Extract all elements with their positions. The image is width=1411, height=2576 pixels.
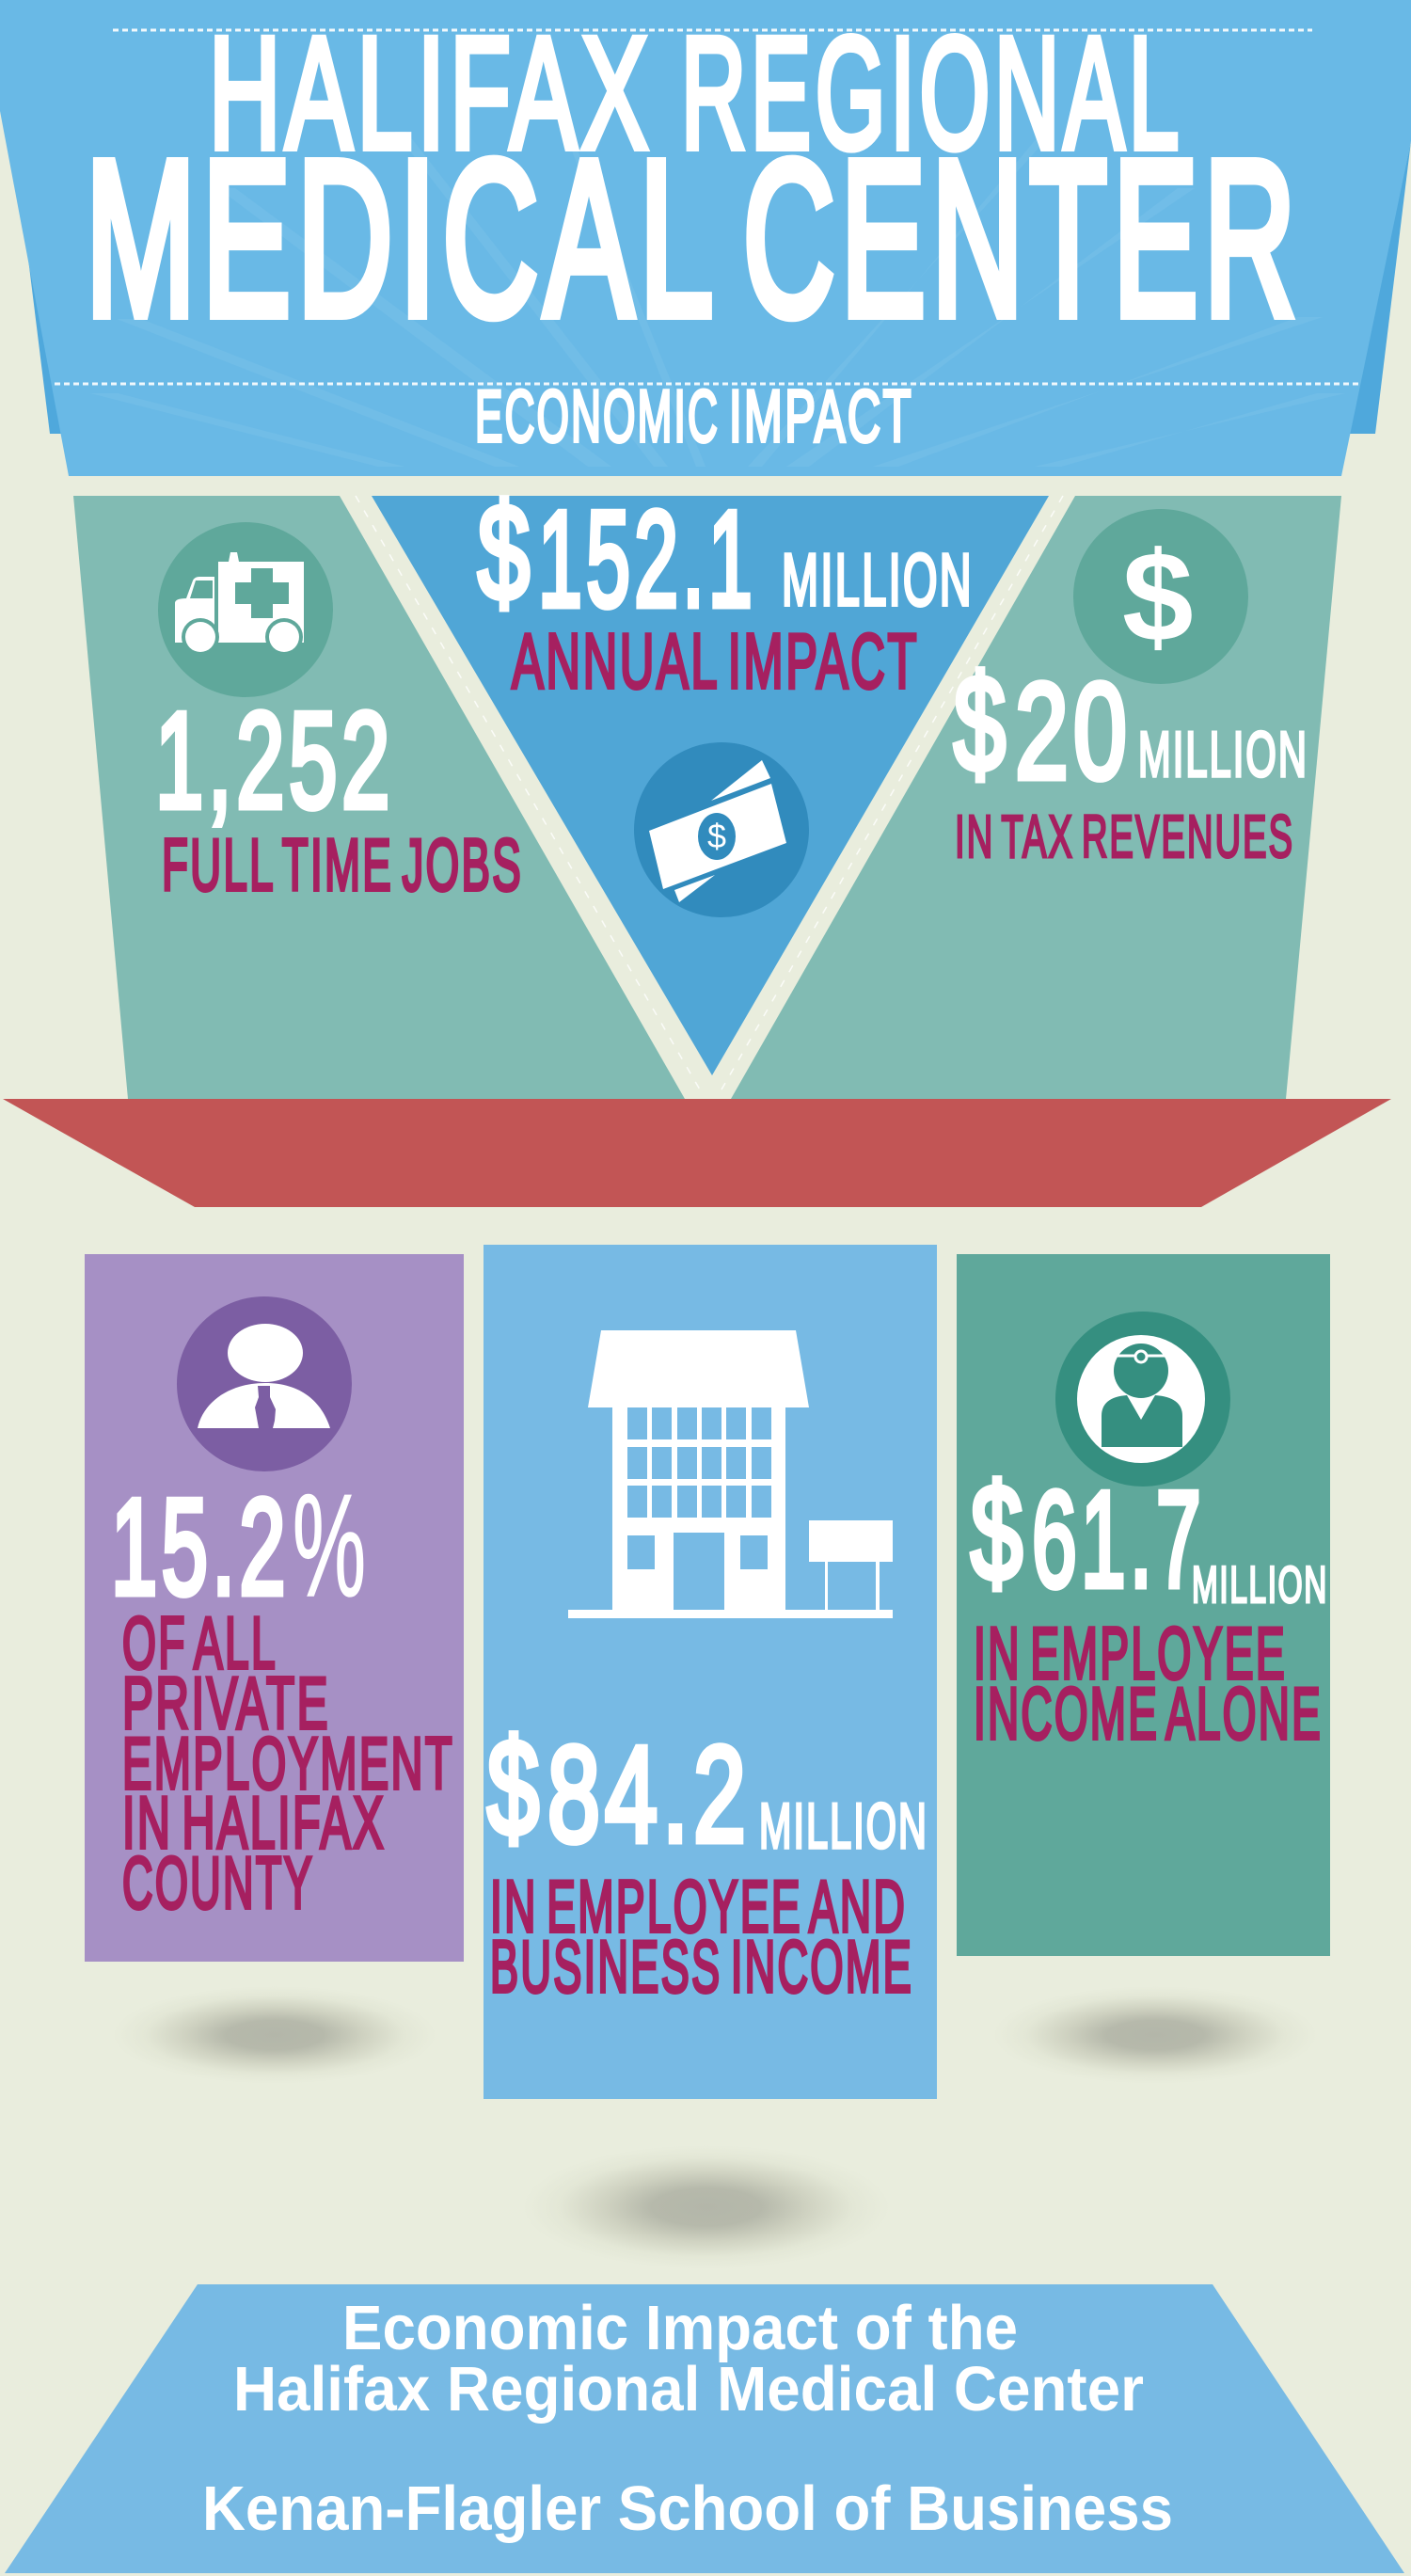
number: income (487, 1711, 751, 1870)
blue card (484, 1245, 937, 2099)
unit: million: MILLION (759, 1790, 928, 1862)
number: annual impact (478, 476, 756, 635)
footer title line one: Economic Impact of the (342, 2293, 1018, 2363)
number: jobs: 1,252 (155, 684, 394, 836)
shadow: center card (523, 2145, 890, 2269)
panel: footer source (5, 2284, 1404, 2573)
dotted rule lower (55, 382, 1361, 386)
icon: ambulance (158, 522, 333, 697)
icon: doctor (1055, 1312, 1230, 1487)
label: of all private employment: IN HALIFAX (122, 1781, 386, 1864)
subtitle: ECONOMIC (475, 374, 720, 457)
icon: person with tie (177, 1296, 352, 1471)
number: tax (954, 647, 1132, 807)
label: in employee and business income (490, 1865, 913, 2008)
label: in employee and business income: BUSINESS INCOME (490, 1925, 913, 2008)
unit: million: MILLION (1138, 719, 1308, 790)
panel: private employment (85, 1254, 464, 1962)
percent sign: % (293, 1464, 366, 1627)
subtitle: IMPACT (729, 374, 913, 457)
number: annual impact: $ (478, 476, 534, 628)
banner front (0, 0, 1411, 476)
panel: header banner (0, 0, 1411, 476)
icon: building (568, 1330, 893, 1618)
stitched dividers (356, 496, 1063, 1096)
jobs trapezoid (73, 496, 685, 1099)
unit: million: MILLION (1192, 1555, 1328, 1614)
footer source line: Kenan-Flagler School of Business (202, 2473, 1173, 2544)
label: of all private employment: EMPLOYMENT (122, 1722, 454, 1805)
footer trapezoid (5, 2284, 1404, 2573)
shadow: left card (113, 1986, 436, 2084)
icon: dollar: $ (1122, 525, 1194, 668)
shadow: right card (993, 1986, 1317, 2084)
title line two: MEDICAL (86, 115, 720, 361)
label: of all private employment: PRIVATE (122, 1662, 330, 1744)
teal card (957, 1254, 1330, 1956)
number: share: 15.2 (111, 1471, 290, 1623)
number: employee income: 61.7 (1032, 1463, 1205, 1615)
panel: employee and business income (484, 1245, 937, 2099)
icon: dollar (1073, 509, 1248, 684)
label: annual impact: ANNUAL IMPACT (512, 617, 919, 705)
blue triangle (372, 496, 1049, 1075)
number: tax: $ (954, 647, 1010, 800)
panel: annual impact (372, 476, 1049, 1075)
number: employee income: $ (971, 1456, 1027, 1609)
label: of all private employment: OF ALL (122, 1601, 277, 1684)
unit: million: MILLION (782, 538, 974, 621)
purple card (85, 1254, 464, 1962)
label: in employee income alone (974, 1612, 1323, 1755)
number: income: 84.2 (547, 1718, 751, 1870)
number: employee income (971, 1456, 1205, 1615)
panel: tax revenues (731, 496, 1341, 1099)
icon: money: $ (707, 817, 726, 855)
title line one: HALIFAX (209, 4, 653, 182)
dotted rule top (113, 28, 1312, 32)
panel: employee income (957, 1254, 1330, 1956)
number: tax: 20 (1015, 655, 1132, 807)
banner back ribbon (28, 141, 1411, 434)
icon: money (634, 742, 809, 917)
number: annual impact: 152.1 (538, 483, 756, 635)
red band (3, 1099, 1391, 1207)
label: of all private employment (122, 1601, 454, 1924)
footer title line two: Halifax Regional Medical Center (233, 2354, 1144, 2425)
label: full time jobs: FULL TIME JOBS (162, 823, 523, 906)
tax trapezoid (731, 496, 1341, 1099)
number: income: $ (487, 1711, 544, 1864)
panel: jobs (73, 496, 685, 1099)
label: of all private employment: COUNTY (122, 1841, 314, 1924)
label: in employee and business income: IN EMPLOYEE AND (490, 1865, 907, 1948)
